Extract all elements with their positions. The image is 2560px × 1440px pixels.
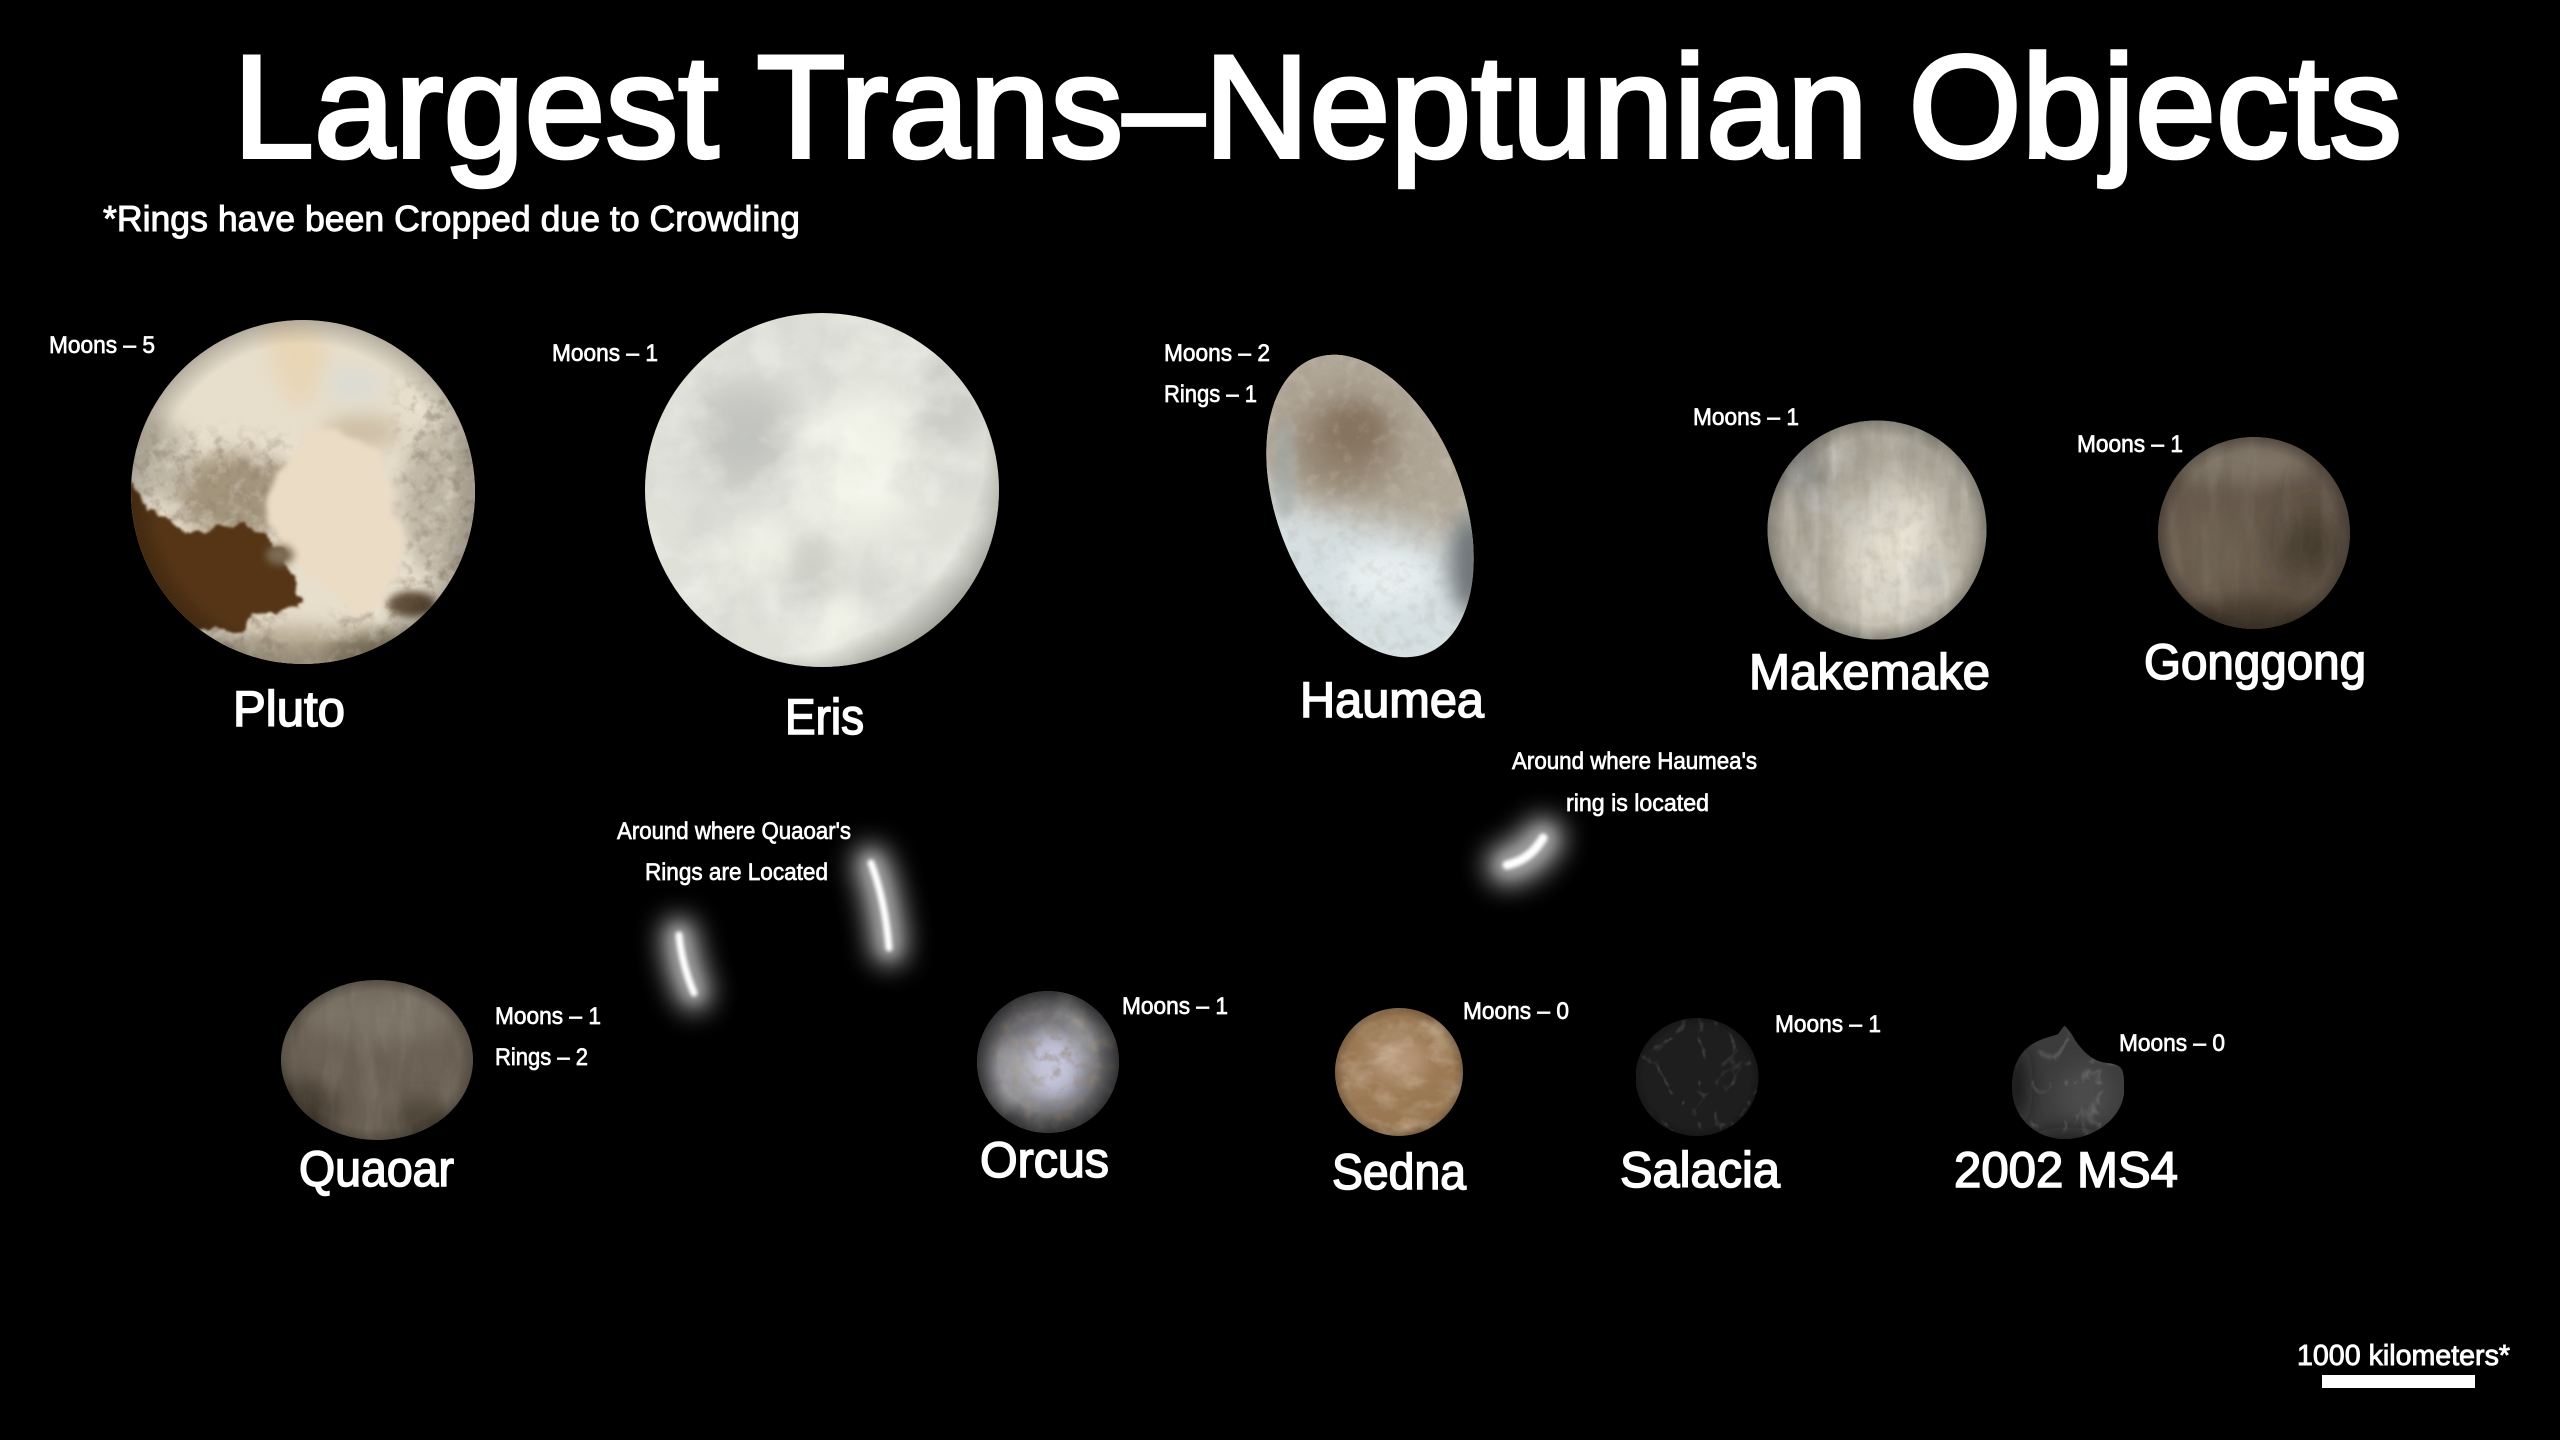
planet: Salacia [1636, 1018, 1760, 1137]
label: Gonggong [2077, 431, 2366, 690]
callout: Quaoar's rings: Rings are Located [645, 859, 828, 886]
label: Makemake: Moons – 1 [1693, 404, 1799, 431]
ring: Quaoar inner arc [679, 935, 694, 993]
label: Eris [552, 340, 864, 745]
label: Eris: Moons – 1 [552, 340, 658, 367]
callout: Haumea's ring [1512, 748, 1757, 817]
callout: Quaoar's rings: Around where Quaoar's [617, 818, 851, 845]
subtitle note: *Rings have been Cropped due to Crowding [103, 198, 800, 239]
planet: Makemake [1767, 420, 1987, 640]
planet: Quaoar [260, 980, 473, 1140]
ring: Haumea arc [1507, 838, 1543, 865]
label: Haumea [1164, 340, 1484, 728]
label: Quaoar: Moons – 1 [495, 1003, 601, 1030]
planet: 2002 MS4 [2012, 1026, 2124, 1139]
label: Sedna: Moons – 0 [1463, 998, 1569, 1025]
label: Salacia: Moons – 1 [1775, 1011, 1881, 1038]
scale bar: 1000 kilometers* [2297, 1340, 2510, 1372]
label: Eris: Eris [785, 689, 864, 745]
label: Pluto [49, 332, 345, 737]
ring: Quaoar outer arc [871, 863, 889, 948]
scale bar [2297, 1340, 2510, 1388]
planet: Pluto [131, 320, 475, 664]
planet: Orcus [977, 991, 1119, 1133]
label: Haumea: Moons – 2 [1164, 340, 1270, 367]
callout: Haumea's ring: ring is located [1566, 790, 1709, 817]
planet: Haumea [1266, 354, 1474, 658]
label: 2002 MS4: Moons – 0 [2119, 1030, 2225, 1057]
label: Gonggong: Moons – 1 [2077, 431, 2183, 458]
label: Haumea: Haumea [1300, 672, 1484, 728]
label: Makemake [1693, 404, 1990, 700]
label: Orcus: Orcus [980, 1132, 1109, 1188]
callout: Quaoar's rings [617, 818, 851, 886]
planet: Gonggong [2158, 436, 2350, 640]
label: 2002 MS4 [1954, 1030, 2225, 1198]
title: Largest Trans–Neptunian Objects [233, 25, 2402, 188]
label: Pluto: Pluto [233, 681, 345, 737]
label: Pluto: Moons – 5 [49, 332, 155, 359]
label: 2002 MS4: 2002 MS4 [1954, 1142, 2178, 1198]
planet: Eris [645, 313, 999, 675]
label: Quaoar: Quaoar [299, 1141, 454, 1197]
label: Orcus: Moons – 1 [1122, 993, 1228, 1020]
label: Gonggong: Gonggong [2144, 634, 2366, 690]
label: Sedna: Sedna [1332, 1144, 1466, 1200]
label: Haumea: Rings – 1 [1164, 381, 1257, 408]
label: Salacia: Salacia [1620, 1142, 1780, 1198]
label: Salacia [1620, 1011, 1881, 1198]
label: Orcus [980, 993, 1228, 1188]
label: Quaoar [299, 1003, 601, 1197]
label: Makemake: Makemake [1749, 644, 1990, 700]
callout: Haumea's ring: Around where Haumea's [1512, 748, 1757, 775]
planet: Sedna [1335, 1008, 1463, 1137]
label: Sedna [1332, 998, 1569, 1200]
label: Quaoar: Rings – 2 [495, 1044, 588, 1071]
